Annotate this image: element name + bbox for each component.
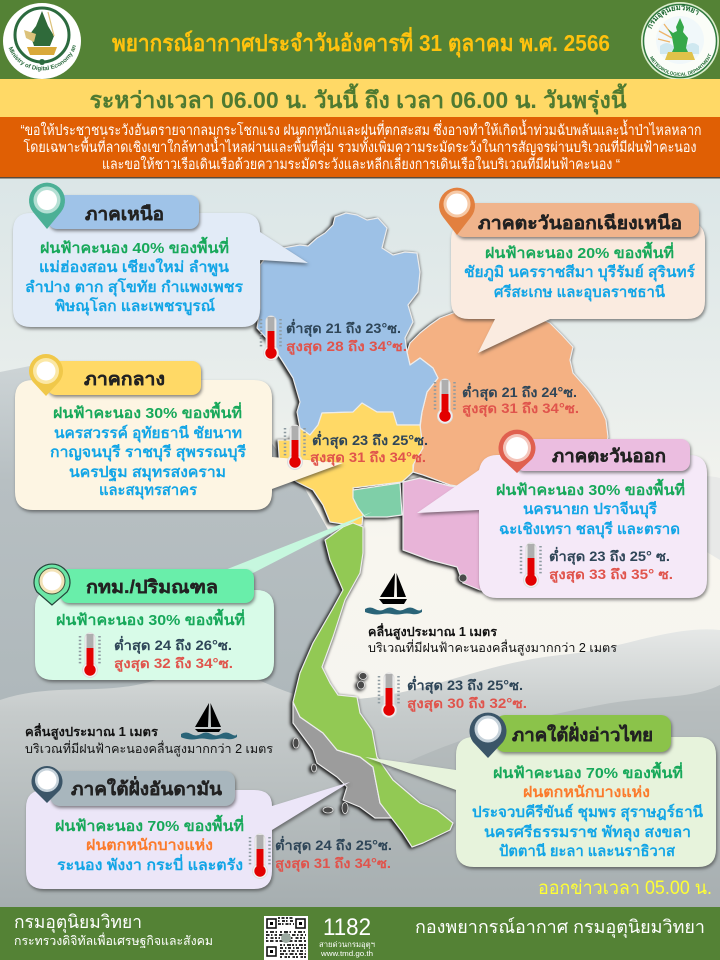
hotline: 1182 <box>323 914 371 941</box>
panel: northeast region <box>439 188 705 353</box>
forecast text: นครปฐม สมุทรสงคราม <box>69 464 226 482</box>
temperature: northeast: สูงสุด 31 ถึง 34°ซ. <box>462 401 579 417</box>
sea conditions: Andaman <box>25 703 273 757</box>
forecast text <box>472 761 704 860</box>
sea conditions: gulf: คลื่นสูงประมาณ 1 เมตร <box>368 623 497 640</box>
issue time: ออกข่าวเวลา 05.00 น. <box>538 878 712 899</box>
map pin <box>32 766 63 803</box>
region title pill: ภาคใต้ฝั่งอันดามัน <box>71 776 223 799</box>
forecast text: ฝนตกหนักบางแห่ง <box>523 784 650 801</box>
map of Thailand <box>257 213 608 847</box>
temperature: central <box>285 425 428 470</box>
sea conditions: gulf: บริเวณที่มีฝนฟ้าคะนองคลื่นสูงมากกว่า 2 เมตร <box>368 639 617 656</box>
region title pill <box>48 195 199 229</box>
temperature <box>521 543 673 588</box>
forecast text: ฝนฟ้าคะนอง 30% ของพื้นที่ <box>53 401 242 422</box>
forecast text <box>496 478 685 539</box>
time range band <box>0 79 720 117</box>
region title pill <box>50 771 235 806</box>
forecast text: ระนอง พังงา กระบี่ และตรัง <box>57 854 243 874</box>
temperature: Andaman: ต่ำสุด 24 ถึง 25°ซ. <box>275 835 392 854</box>
region title pill: ภาคใต้ฝั่งอ่าวไทย <box>512 722 653 745</box>
temperature: Andaman <box>250 834 392 878</box>
islands <box>293 574 467 814</box>
temperature: สูงสุด 32 ถึง 34°ซ. <box>114 656 233 672</box>
sea conditions: gulf <box>365 573 617 656</box>
region: Gulf south <box>293 523 453 847</box>
forecast text: กาญจนบุรี ราชบุรี สุพรรณบุรี <box>50 444 247 462</box>
forecast text: ลำปาง ตาก สุโขทัย กำแพงเพชร <box>25 277 244 297</box>
region title pill: ภาคตะวันออก <box>552 446 666 466</box>
department name: กรมอุตุนิยมวิทยา <box>14 912 142 933</box>
bubble body <box>15 380 343 510</box>
temperature: northeast: ต่ำสุด 21 ถึง 24°ซ. <box>462 382 577 401</box>
region: east <box>403 478 500 590</box>
hotline: สายด่วนกรมอุตุฯ <box>319 940 375 949</box>
footer band <box>0 907 720 960</box>
forecast text: นครศรีธรรมราช พัทลุง สงขลา <box>484 824 691 842</box>
region title pill <box>47 361 201 395</box>
map pin <box>470 713 506 758</box>
forecast text: ฝนฟ้าคะนอง 70% ของพื้นที่ <box>493 761 683 782</box>
temperature: ต่ำสุด 23 ถึง 25° ซ. <box>549 546 670 565</box>
warning band: และขอให้ชาวเรือเดินเรือด้วยความระมัดระวังและหลีกเลี่ยงการเดินเรือในบริเวณที่มีฝนฟ้าคะนอง “ <box>102 154 620 173</box>
region title pill: กทม./ปริมณฑล <box>86 577 218 597</box>
icon: boat on waves <box>181 703 237 740</box>
hotline <box>319 914 375 958</box>
panel: Bangkok and vicinity <box>34 512 372 680</box>
QR code <box>264 916 308 960</box>
temperature: Andaman: สูงสุด 31 ถึง 34°ซ. <box>275 856 391 872</box>
region: north <box>257 213 438 435</box>
temperature: south gulf <box>379 673 527 718</box>
background sky and mountains <box>0 178 720 908</box>
department name: กระทรวงดิจิทัลเพื่อเศรษฐกิจและสังคม <box>14 932 213 948</box>
sea conditions: Andaman: บริเวณที่มีฝนฟ้าคะนองคลื่นสูงมากกว่า 2 เมตร <box>25 740 273 757</box>
region title pill <box>455 203 699 237</box>
temperature: ต่ำสุด 24 ถึง 26°ซ. <box>114 635 232 654</box>
map pin <box>29 354 63 396</box>
panel: central region <box>15 354 343 510</box>
forecast text: ฝนฟ้าคะนอง 40% ของพื้นที่ <box>40 236 229 257</box>
map pin <box>498 430 536 473</box>
map pin <box>439 188 475 235</box>
region: northeast <box>407 300 608 490</box>
panel: Gulf south region <box>365 713 716 867</box>
temperature: north: สูงสุด 28 ถึง 34°ซ. <box>286 339 407 355</box>
temperature: north <box>261 316 407 360</box>
panel: north region <box>13 183 308 327</box>
region title pill <box>495 715 671 752</box>
bubble body <box>451 222 705 353</box>
forecast text: ฝนฟ้าคะนอง 70% ของพื้นที่ <box>55 814 244 835</box>
logo: meteorological department <box>641 2 719 79</box>
temperature: central: สูงสุด 31 ถึง 34°ซ. <box>310 450 426 466</box>
hotline: www.tmd.go.th <box>320 949 373 958</box>
forecast text: แม่ฮ่องสอน เชียงใหม่ ลำพูน <box>39 258 230 277</box>
region: Andaman coast <box>293 702 392 818</box>
forecast text: ฝนฟ้าคะนอง 30% ของพื้นที่ <box>496 478 685 499</box>
department name <box>14 912 213 948</box>
temperature: สูงสุด 33 ถึง 35° ซ. <box>549 567 673 583</box>
map pin <box>34 564 70 605</box>
logo: meteorological department: กรมอุตุนิยมวิทยา <box>648 4 699 29</box>
forecast text: และสมุทรสาคร <box>99 482 198 500</box>
forecast text: นครนายก ปราจีนบุรี <box>523 501 658 519</box>
warning band <box>0 117 720 178</box>
logo: meteorological department: METEOROLOGICAL DEPARTMENT <box>650 53 712 76</box>
temperature: south gulf: สูงสุด 30 ถึง 32°ซ. <box>407 696 527 712</box>
time range band: ระหว่างเวลา 06.00 น. วันนี้ ถึง เวลา 06.00 น. วันพรุ่งนี้ <box>90 83 628 115</box>
bubble body <box>13 213 308 327</box>
region: Bangkok <box>353 483 402 517</box>
map pin <box>29 183 65 229</box>
forecast text: นครสวรรค์ อุทัยธานี ชัยนาท <box>54 424 242 443</box>
icon: boat on waves <box>365 573 422 614</box>
forecast text: พิษณุโลก และเพชรบูรณ์ <box>55 296 215 316</box>
bubble body <box>35 590 274 680</box>
region title pill: ภาคกลาง <box>84 369 165 389</box>
panel: Andaman coast region <box>26 766 350 889</box>
forecast text: ฝนตกหนักบางแห่ง <box>86 837 213 854</box>
forecast text: ฝนฟ้าคะนอง 30% ของพื้นที่ <box>56 608 245 629</box>
forecast text: ประจวบคีรีขันธ์ ชุมพร สุราษฎร์ธานี <box>472 803 704 822</box>
weather forecast bureau: กองพยากรณ์อากาศ กรมอุตุนิยมวิทยา <box>415 917 705 938</box>
bubble body <box>417 455 707 598</box>
panel: east region <box>417 430 707 598</box>
title: พยากรณ์อากาศประจำวันอังคารที่ 31 ตุลาคม พ.ศ. 2566 <box>112 26 610 58</box>
region title pill: ภาคตะวันออกเฉียงเหนือ <box>478 213 682 233</box>
forecast text: ฉะเชิงเทรา ชลบุรี และตราด <box>499 520 680 539</box>
forecast text: ปัตตานี ยะลา และนราธิวาส <box>499 842 676 860</box>
forecast text: ศรีสะเกษ และอุบลราชธานี <box>494 284 666 302</box>
region title pill: ภาคเหนือ <box>85 204 164 224</box>
forecast text <box>25 236 244 316</box>
forecast text: ฝนฟ้าคะนอง 20% ของพื้นที่ <box>485 241 674 262</box>
temperature: north: ต่ำสุด 21 ถึง 23°ซ. <box>286 318 401 337</box>
forecast text <box>464 241 696 302</box>
temperature: northeast <box>435 379 579 424</box>
forecast text: ชัยภูมิ นครราชสีมา บุรีรัมย์ สุรินทร์ <box>464 263 696 282</box>
bubble body <box>26 782 350 889</box>
region title pill <box>515 439 690 471</box>
forecast text <box>55 814 244 874</box>
temperature: south gulf: ต่ำสุด 23 ถึง 25°ซ. <box>407 675 523 694</box>
forecast text <box>50 401 247 500</box>
temperature <box>80 633 233 678</box>
region title pill <box>60 569 254 603</box>
temperature: central: ต่ำสุด 23 ถึง 25°ซ. <box>312 430 428 449</box>
region: central <box>278 403 423 525</box>
header band <box>0 0 720 79</box>
sea conditions: Andaman: คลื่นสูงประมาณ 1 เมตร <box>25 723 158 740</box>
pointer <box>225 512 372 573</box>
bubble body <box>365 737 716 867</box>
